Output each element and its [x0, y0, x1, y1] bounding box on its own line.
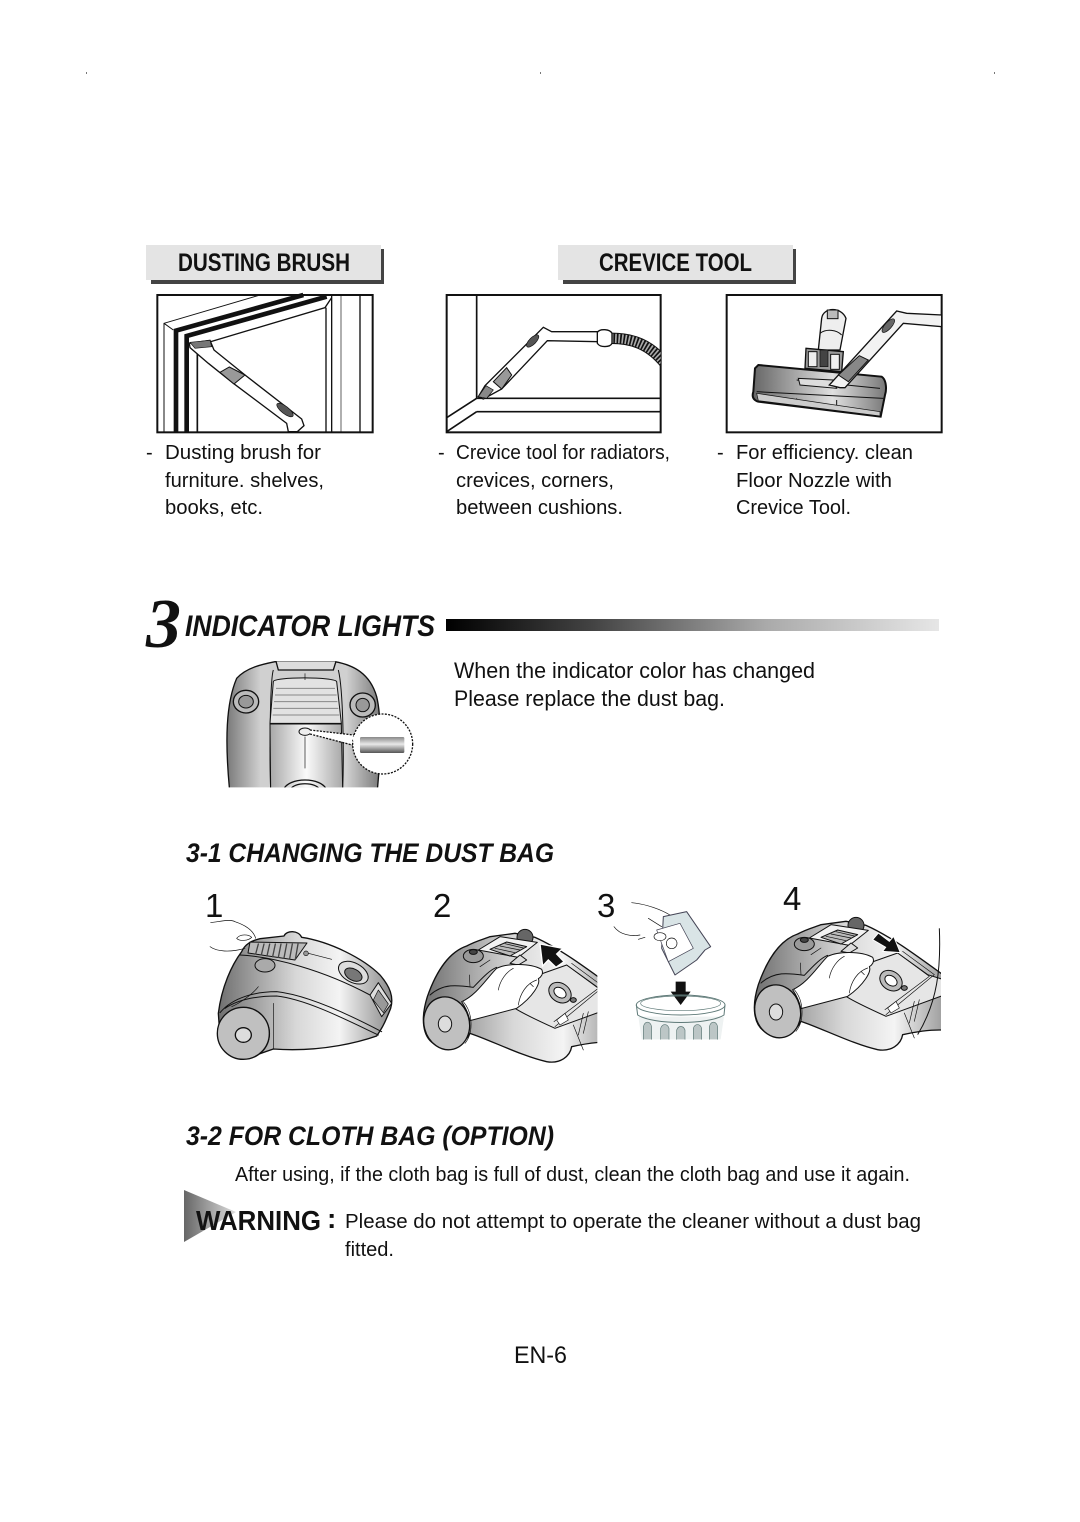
page number: EN-6: [514, 1342, 567, 1369]
step number 4: 4: [783, 880, 801, 917]
arrow: close: [873, 933, 900, 953]
warning callout: Please do not attempt to operate the cleaner without a dust bag: [345, 1211, 921, 1233]
description: dusting brush: -: [146, 442, 153, 464]
arrow: lift: [540, 944, 564, 967]
description: floor nozzle: For efficiency. clean: [736, 442, 913, 464]
illustration: step 4 closing the cover: [749, 917, 954, 1050]
description: dusting brush: furniture. shelves,: [165, 470, 324, 492]
illustration: crevice tool on floor nozzle: [727, 295, 942, 432]
description: crevice tool: between cushions.: [456, 497, 623, 519]
step number 2: 2: [433, 887, 451, 924]
section heading: indicator lights: [145, 586, 939, 663]
description: floor nozzle: Crevice Tool.: [736, 497, 851, 519]
description: dusting brush: [146, 442, 324, 519]
text: indicator instruction: [454, 658, 815, 711]
description: crevice tool: Crevice tool for radiators,: [456, 442, 670, 464]
illustration: step 1 opening cleaner: [210, 920, 392, 1059]
description: floor nozzle: [717, 442, 913, 519]
heading: changing the dust bag: 3-1 CHANGING THE DUST BAG: [186, 838, 554, 868]
description: dusting brush: books, etc.: [165, 497, 263, 519]
description: crevice tool: -: [438, 442, 445, 464]
warning callout: :: [327, 1203, 336, 1234]
illustration: step 3 dropping bag into bin: [614, 903, 725, 1039]
text: indicator instruction: When the indicator color has changed: [454, 658, 815, 683]
arrow: down: [671, 982, 691, 1005]
warning callout: fitted.: [345, 1239, 394, 1261]
section heading: indicator lights: INDICATOR LIGHTS: [185, 610, 435, 643]
description: floor nozzle: -: [717, 442, 724, 464]
heading: crevice tool: [558, 245, 796, 284]
description: crevice tool: [438, 442, 670, 519]
warning callout: WARNING: [196, 1205, 321, 1236]
magnifier: [310, 714, 413, 774]
illustration: step 2 lifting the cover: [422, 928, 598, 1063]
section heading: indicator lights: 3: [145, 586, 181, 663]
text: cloth bag instruction: After using, if the cloth bag is full of dust, clean the cloth bag and use it again.: [235, 1164, 910, 1186]
description: floor nozzle: Floor Nozzle with: [736, 470, 892, 492]
illustration: dusting brush on frame: [157, 295, 373, 432]
heading: dusting brush: DUSTING BRUSH: [178, 249, 350, 277]
illustration: crevice tool on radiator: [447, 295, 665, 432]
heading: for cloth bag: 3-2 FOR CLOTH BAG (OPTION): [186, 1121, 554, 1151]
heading: dusting brush: [146, 245, 384, 284]
heading: crevice tool: CREVICE TOOL: [599, 249, 752, 277]
text: indicator instruction: Please replace the dust bag.: [454, 686, 725, 711]
description: crevice tool: crevices, corners,: [456, 470, 614, 492]
crop marks: [86, 72, 995, 74]
illustration: indicator light on cleaner: [227, 661, 413, 790]
step number 3: 3: [597, 887, 615, 924]
step number 1: 1: [205, 887, 223, 924]
waste bin: [636, 995, 725, 1039]
description: dusting brush: Dusting brush for: [165, 442, 321, 464]
warning callout: [184, 1190, 921, 1261]
